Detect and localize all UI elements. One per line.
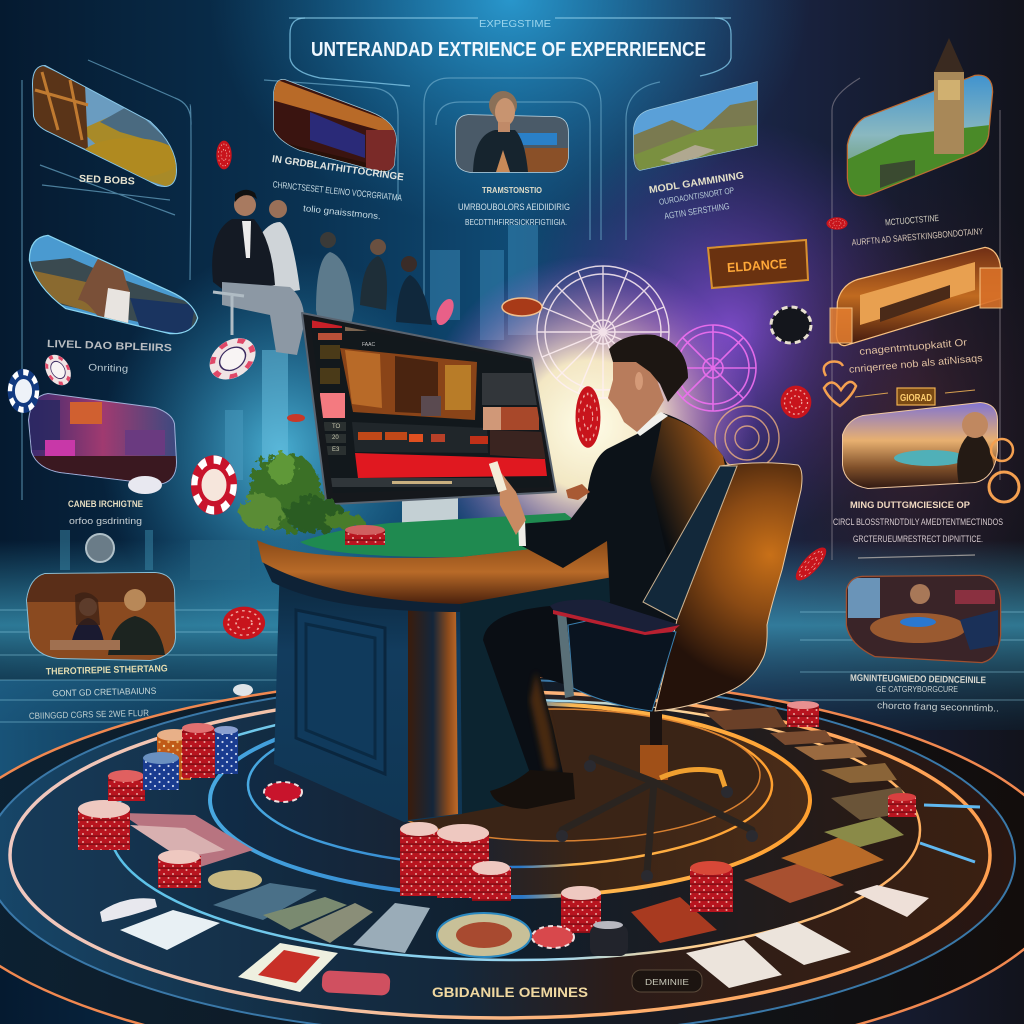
panel: right 1 tower landscape bbox=[846, 38, 992, 248]
caption line: chorcto frang seconntimb.. bbox=[877, 700, 999, 715]
stack bbox=[214, 726, 238, 774]
stack bbox=[561, 886, 601, 933]
panel frames bbox=[22, 60, 1000, 560]
caption: MGNINTEUGMIEDO DEIDNCEINILE bbox=[850, 673, 986, 686]
shoe bbox=[490, 770, 575, 809]
panel: top right mountains bbox=[630, 80, 760, 223]
panel: left 2 woman and landscape bbox=[28, 235, 200, 376]
platform rings bbox=[0, 676, 1024, 1024]
caption: SED BOBS bbox=[79, 174, 135, 188]
panel: top centre presenter: BECDTTIHFIRRSICKRFIGTIIGIA. bbox=[465, 217, 567, 227]
title: UNTERANDAD EXTRIENCE OF EXPERRIEENCE bbox=[311, 39, 706, 61]
caption: AURFTN AD SARESTKINGBONDOTAINY bbox=[851, 226, 984, 248]
flying chips bbox=[8, 141, 848, 696]
chip bbox=[216, 141, 232, 169]
panel: top centre presenter: UMRBOUBOLORS AEIDIIDIRIG bbox=[458, 202, 570, 212]
stack bbox=[158, 850, 201, 888]
face bbox=[608, 360, 664, 432]
person lower body bbox=[483, 600, 650, 809]
caption: THEROTIREPIE STHERTANG bbox=[46, 663, 168, 678]
chip small bbox=[287, 414, 305, 422]
caption: cnagentmtuopkatit Or bbox=[859, 337, 968, 358]
caption bbox=[271, 154, 405, 221]
person upper body bbox=[489, 335, 735, 640]
stack bbox=[787, 701, 819, 727]
hand with card bbox=[499, 470, 526, 535]
platform label: GBIDANILE OEMINES bbox=[432, 984, 588, 1000]
neon heart and key bbox=[824, 362, 1019, 502]
desk bbox=[257, 513, 613, 822]
panel: top centre presenter bbox=[455, 91, 570, 227]
stack bbox=[182, 723, 215, 778]
caption: LIVEL DAO BPLEIIRS bbox=[47, 338, 172, 354]
chair base bbox=[556, 708, 758, 882]
caption line: GE CATGRYBORGCURE bbox=[876, 684, 958, 694]
chip bbox=[223, 607, 265, 639]
stack bbox=[400, 822, 438, 896]
chip dark bbox=[771, 307, 811, 343]
monitor bbox=[300, 310, 560, 529]
chip bbox=[576, 386, 600, 448]
plant bbox=[240, 452, 365, 533]
stack bbox=[78, 800, 130, 850]
panel: top theatre bbox=[271, 78, 405, 221]
panel: left 1 scenic bridge bbox=[30, 60, 180, 190]
chip bbox=[791, 543, 831, 585]
desk top bbox=[257, 540, 613, 604]
stack bbox=[437, 824, 489, 898]
chip bbox=[191, 455, 237, 515]
chair side panel bbox=[643, 466, 737, 620]
stack bbox=[157, 729, 191, 780]
caption line: orfoo gsdrinting bbox=[69, 516, 142, 526]
panel: right 3 resort view bbox=[833, 400, 1003, 544]
other hand bbox=[566, 484, 590, 500]
chips on desk bbox=[345, 525, 385, 545]
chip bbox=[264, 782, 302, 802]
caption: MODL GAMMINING bbox=[648, 170, 745, 196]
warm glow bbox=[420, 255, 760, 595]
caption: tolio gnaisstmons. bbox=[303, 203, 381, 221]
small pill bbox=[632, 970, 702, 992]
armrest support bbox=[557, 612, 574, 698]
stack bbox=[472, 861, 511, 901]
monitor: 20 bbox=[332, 435, 339, 441]
caption: CANEB IRCHIGTNE bbox=[68, 499, 143, 509]
cards and scene tiles on platform bbox=[100, 707, 980, 996]
stack bbox=[108, 770, 145, 801]
panel: right 4 gaming table bbox=[844, 570, 1002, 715]
chip bbox=[532, 926, 574, 948]
caption: CHRNCTSESET ELEINO VOCRGRIATMA bbox=[272, 179, 402, 203]
caption bbox=[847, 336, 983, 376]
chair front bbox=[550, 463, 802, 711]
cuff bbox=[518, 520, 526, 546]
jacket bbox=[518, 413, 735, 640]
chip white bbox=[128, 476, 162, 494]
armrest bbox=[550, 600, 680, 634]
caption: Onriting bbox=[88, 362, 128, 375]
caption bbox=[648, 170, 749, 223]
hair bbox=[609, 335, 688, 402]
neon sign: eldance: ELDANCE bbox=[727, 256, 788, 275]
caption: MING DUTTGMCIESICE OP bbox=[850, 500, 971, 511]
caption: MCTUOCTSTINE bbox=[885, 213, 939, 228]
chip bbox=[8, 369, 39, 413]
cards and scene tiles on platform: DEMINIIE bbox=[645, 978, 689, 987]
panel: left 4 two people at bar bbox=[26, 572, 176, 721]
caption bbox=[850, 209, 984, 248]
chair back bbox=[655, 463, 802, 711]
neon ferris wheels bbox=[537, 266, 779, 470]
caption: AGTIN SERSTHING bbox=[664, 201, 730, 221]
lower desk rim bbox=[262, 560, 460, 612]
screen labels: TO bbox=[332, 424, 341, 430]
stack bbox=[143, 752, 179, 790]
stack bbox=[690, 861, 733, 912]
desk body bbox=[274, 560, 462, 822]
caption: GONT GD CRETIABAIUNS bbox=[52, 686, 156, 698]
chip grey bbox=[86, 534, 114, 562]
caption: TRAMSTONSTIO bbox=[482, 185, 542, 195]
caption bbox=[28, 663, 169, 721]
chip bbox=[40, 350, 76, 390]
dish bbox=[437, 913, 531, 957]
chip stacks bbox=[78, 701, 916, 956]
stand bbox=[402, 498, 484, 529]
caption: cnriqerree nob als atiNisaqs bbox=[849, 353, 983, 376]
dark stack bbox=[590, 921, 628, 956]
city skyline bbox=[60, 225, 538, 580]
panel: right 2 neon lounge bbox=[830, 244, 1002, 376]
chair seat bbox=[568, 618, 676, 711]
caption bbox=[46, 338, 172, 376]
chip bbox=[781, 386, 811, 418]
trousers bbox=[483, 600, 650, 773]
monitor: FAAC bbox=[362, 342, 375, 348]
chip pink bbox=[433, 296, 457, 328]
neon sign: eldance bbox=[708, 240, 808, 288]
caption: OUROAONTISNORT OP bbox=[658, 185, 735, 207]
neon sign: glorad: GIORAD bbox=[900, 393, 932, 404]
stack bbox=[888, 793, 916, 817]
neon sign: glorad bbox=[855, 388, 975, 405]
monitor: E3 bbox=[332, 447, 340, 453]
chip small white bbox=[233, 684, 253, 696]
chip orange bbox=[502, 298, 542, 316]
collar bbox=[634, 412, 668, 436]
chip bbox=[826, 217, 848, 230]
chip bbox=[202, 330, 263, 388]
ear bbox=[635, 372, 643, 390]
caption: IN GRDBLAITHITTOCRINGE bbox=[271, 154, 405, 183]
people group bbox=[212, 190, 432, 355]
panel: right 3 resort view: GRCTERUEUMRESTRECT DIPNITTICE. bbox=[853, 534, 983, 544]
eyebrow text: EXPEGSTIME bbox=[479, 19, 551, 30]
panel: left 3 casino street bbox=[28, 392, 180, 526]
title banner bbox=[289, 18, 731, 86]
desk interior bbox=[455, 560, 612, 815]
caption: CBIINGGD CGRS SE 2WE FLUR bbox=[29, 708, 149, 721]
